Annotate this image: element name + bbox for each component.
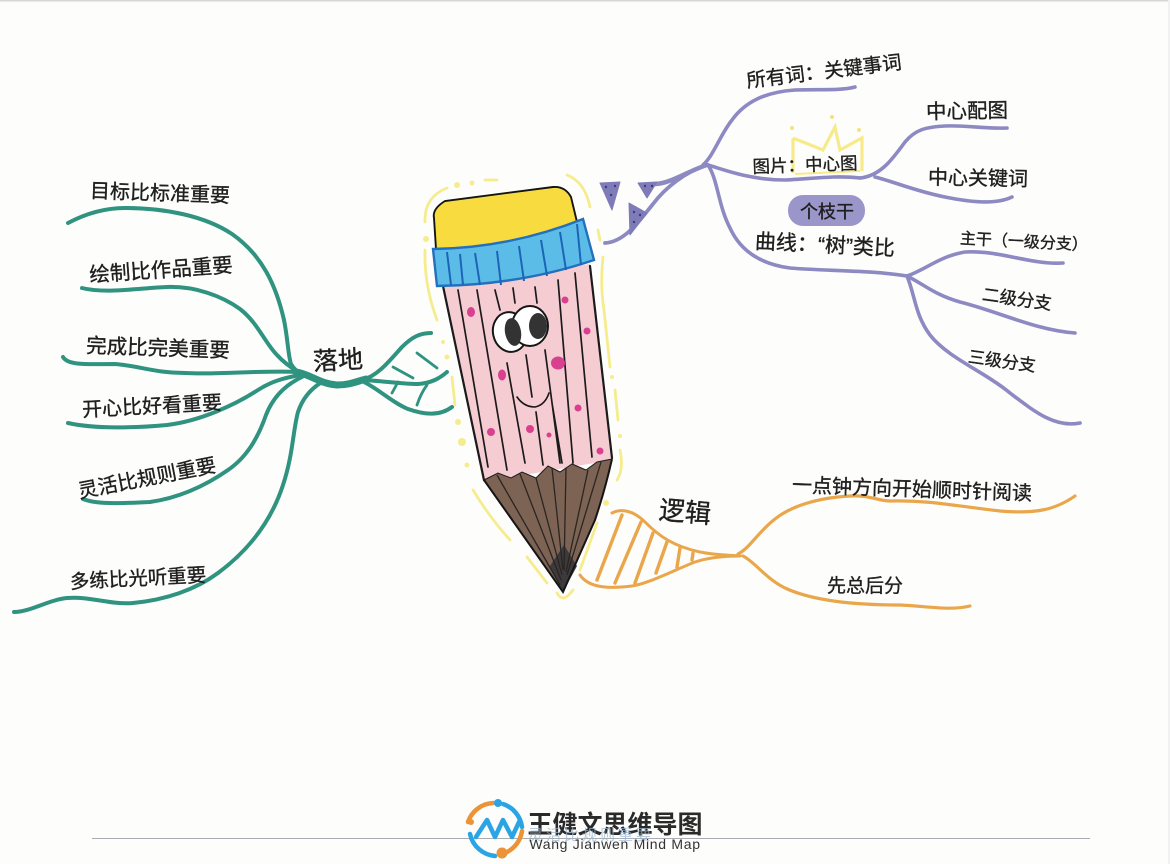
illustration: pencil [433, 187, 612, 592]
label: 三级分支: 三级分支 [967, 347, 1037, 376]
branch group: 落地 (green) [14, 208, 452, 612]
label: 曲线：“树”类比: 曲线：“树”类比 [754, 230, 895, 261]
pencil face: eyes [489, 306, 548, 355]
labels: purple branch text [745, 52, 1088, 376]
pencil body [443, 264, 612, 482]
branch: 图片 [708, 165, 860, 180]
branch: 三级分支 [907, 276, 1080, 424]
label: 灵活比规则重要: 灵活比规则重要 [76, 454, 218, 503]
label: 绘制比作品重要: 绘制比作品重要 [89, 254, 233, 287]
label: 主干（一级分支）: 主干（一级分支） [960, 230, 1088, 254]
main stem: 落地 [296, 372, 366, 385]
label: 二级分支: 二级分支 [981, 284, 1053, 314]
logo: 王健文思维导图 [468, 799, 703, 858]
pencil outline and stripes [443, 266, 612, 480]
branch: 所有词 [703, 87, 855, 165]
label: 开心比好看重要: 开心比好看重要 [82, 391, 223, 422]
branch: 一点钟方向开始顺时针阅读 [738, 496, 1075, 554]
label: 目标比标准重要: 目标比标准重要 [90, 180, 230, 207]
icon: yellow crown [790, 115, 862, 174]
leaf with stripes [580, 511, 740, 587]
pencil eraser [434, 187, 577, 249]
branch: 中心配图 [860, 126, 1007, 178]
logo title: 王健文思维导图 [527, 805, 703, 841]
branch: 先总后分 [743, 556, 970, 608]
label: 落地: 落地 [312, 346, 364, 376]
label: 逻辑: 逻辑 [658, 495, 712, 529]
label: 中心关键词: 中心关键词 [928, 166, 1028, 191]
pencil band [433, 219, 594, 286]
branch: 主干 [907, 252, 1063, 276]
pencil lead tip [484, 459, 612, 592]
branch: 开心比好看重要 [68, 375, 300, 427]
branch group: purple [600, 87, 1080, 424]
branch: 多练比光听重要 [14, 382, 322, 612]
label: 一点钟方向开始顺时针阅读: 一点钟方向开始顺时针阅读 [792, 474, 1032, 505]
label: 先总后分: 先总后分 [827, 575, 903, 597]
label: 枝干: 个枝干 [800, 202, 854, 222]
branch: 曲线 [708, 165, 907, 276]
branch: 二级分支 [907, 276, 1075, 333]
leaf outline [362, 333, 452, 414]
labels: 落地 branch text [69, 180, 364, 594]
label: 多练比光听重要: 多练比光听重要 [69, 564, 207, 594]
logo mark [468, 799, 522, 858]
labels: 逻辑 branch text [658, 474, 1032, 597]
branch: 灵活比规则重要 [83, 377, 302, 503]
label: 完成比完美重要: 完成比完美重要 [86, 335, 230, 362]
pencil face: smile [517, 393, 549, 407]
decorative pencil glow: yellow dashes [423, 175, 622, 598]
label: 图片：中心图: 图片：中心图 [752, 153, 858, 177]
branch: 目标比标准重要 [68, 208, 302, 374]
logo watermark: 灵活比规则重要 [528, 827, 654, 844]
highlight blob: 枝干 [788, 195, 865, 226]
branch: 绘制比作品重要 [82, 287, 300, 373]
branch group: 逻辑 (orange) [580, 496, 1075, 608]
branch: 完成比完美重要 [63, 357, 300, 373]
flag bunting [600, 165, 707, 243]
label: 所有词：关键词: 所有词：关键事词 [745, 52, 903, 92]
footer rule [92, 838, 1090, 839]
label: 中心配图: 中心配图 [926, 99, 1008, 124]
pencil cheek dots [467, 296, 604, 454]
branch: 中心关键词 [875, 177, 1012, 202]
logo subtitle: Wang Jianwen Mind Map [529, 836, 701, 852]
